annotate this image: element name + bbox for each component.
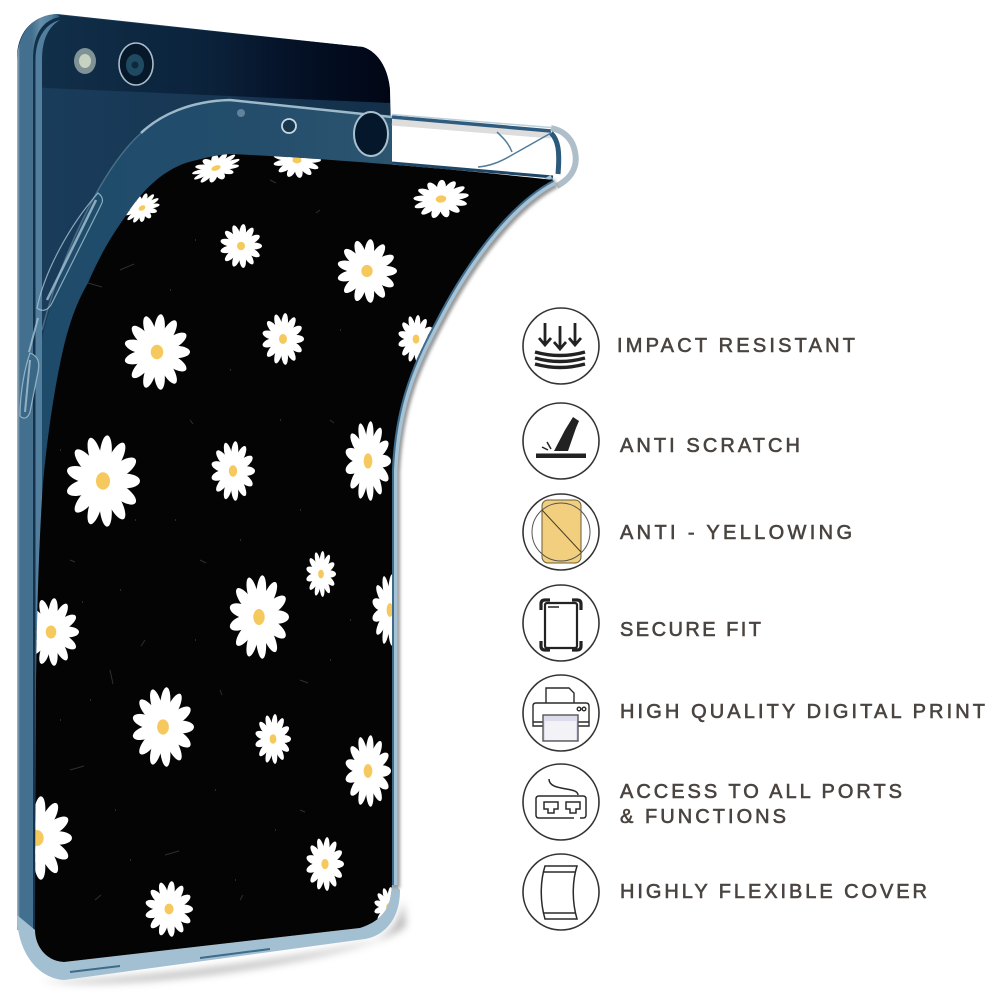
daisy bbox=[372, 574, 392, 646]
right case rim bbox=[392, 180, 556, 888]
label: ANTI SCRATCH bbox=[620, 435, 800, 457]
daisy bbox=[192, 154, 240, 182]
feature: access to ports bbox=[523, 764, 902, 840]
daisy bbox=[374, 887, 392, 919]
daisy bbox=[306, 551, 336, 597]
daisy bbox=[398, 315, 432, 362]
flash bbox=[74, 48, 96, 74]
label: SECURE FIT bbox=[620, 619, 761, 641]
printed black panel bbox=[35, 154, 553, 962]
label bbox=[620, 781, 902, 828]
daisy bbox=[345, 735, 391, 807]
small mic hole bbox=[282, 119, 296, 133]
daisy bbox=[35, 796, 72, 880]
camera lens bbox=[119, 43, 153, 85]
feature: high quality digital print bbox=[523, 675, 985, 751]
feature: anti scratch bbox=[523, 403, 800, 479]
label: & FUNCTIONS bbox=[620, 806, 786, 828]
icon: phone with corner bumpers bbox=[523, 585, 599, 661]
feature: anti yellowing bbox=[523, 494, 852, 570]
drop shadow under case bbox=[40, 900, 406, 983]
daisy bbox=[220, 224, 262, 268]
label: HIGH QUALITY DIGITAL PRINT bbox=[620, 701, 985, 723]
daisy bbox=[126, 193, 160, 223]
feature: impact resistant bbox=[523, 308, 855, 384]
label: ACCESS TO ALL PORTS bbox=[620, 781, 902, 803]
clear case shell bbox=[42, 99, 392, 500]
daisy bbox=[145, 881, 193, 937]
daisy bbox=[124, 314, 190, 390]
daisy bbox=[274, 156, 321, 178]
feature: secure fit bbox=[523, 585, 761, 661]
feature list bbox=[523, 308, 985, 930]
icon: printer bbox=[523, 675, 599, 751]
case top-right rim bbox=[392, 114, 576, 186]
daisy pattern bbox=[2, 142, 471, 937]
phone with clear case bbox=[2, 14, 576, 983]
icon: ports socket bbox=[523, 764, 599, 840]
camera hole in case bbox=[354, 112, 388, 156]
daisy bbox=[262, 313, 304, 365]
daisy bbox=[345, 421, 391, 501]
phone body bbox=[17, 14, 392, 930]
feature: flexible cover bbox=[523, 854, 927, 930]
icon: bent cover bbox=[523, 854, 599, 930]
daisy bbox=[66, 434, 140, 528]
daisy bbox=[229, 574, 289, 660]
daisy bbox=[413, 180, 469, 218]
daisy bbox=[306, 837, 344, 891]
label: HIGHLY FLEXIBLE COVER bbox=[620, 881, 927, 903]
icon: yellow phone crossed bbox=[523, 494, 599, 570]
daisy bbox=[36, 598, 79, 666]
bottom case rim bbox=[17, 880, 400, 980]
daisy bbox=[132, 687, 194, 767]
icon: blade scratching surface bbox=[523, 403, 599, 479]
daisy bbox=[211, 441, 255, 501]
label: IMPACT RESISTANT bbox=[617, 335, 855, 357]
daisy bbox=[255, 714, 291, 764]
left frame strips bbox=[17, 14, 60, 930]
daisy bbox=[337, 239, 397, 303]
label: ANTI - YELLOWING bbox=[620, 522, 852, 544]
icon: arrows on layers bbox=[523, 308, 599, 384]
side button mouldings bbox=[20, 193, 102, 418]
